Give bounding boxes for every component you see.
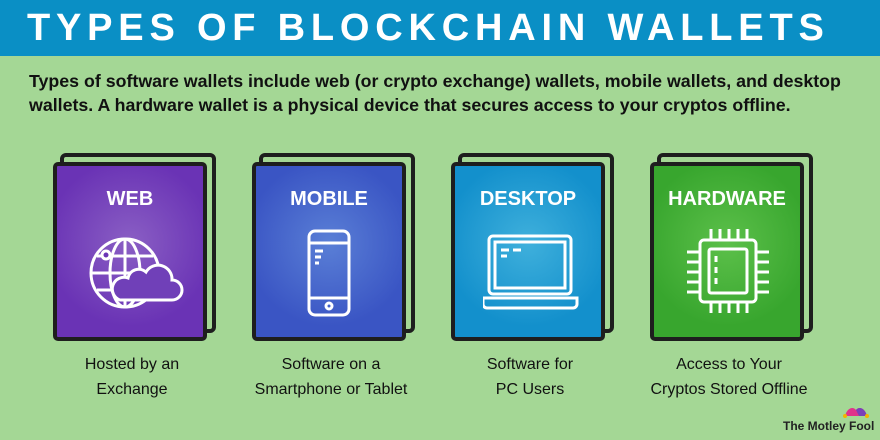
- header band: [0, 0, 880, 56]
- card: mobile: [252, 153, 415, 341]
- icon: jester hat: [843, 408, 869, 418]
- card: hardware: HARDWARE: [668, 188, 786, 210]
- caption: mobile: Software on a: [282, 356, 380, 373]
- icon: globe with cloud: [90, 238, 184, 308]
- caption: web: [85, 356, 179, 398]
- card: web: WEB: [107, 188, 153, 210]
- icon: smartphone: [308, 230, 350, 316]
- caption: hardware: [650, 356, 808, 398]
- card: mobile: MOBILE: [290, 188, 368, 210]
- card: desktop: DESKTOP: [480, 188, 576, 210]
- card: web: [53, 153, 216, 341]
- intro text: Types of software wallets include web (or crypto exchange) wallets, mobile wallets, and desktop wallets. A hardware wallet is a physical device that secures access to your cryptos offline.: [29, 71, 841, 115]
- logo: The Motley Fool: The Motley Fool: [783, 419, 874, 433]
- caption: mobile: Smartphone or Tablet: [255, 381, 407, 398]
- logo: The Motley Fool: [783, 408, 874, 433]
- caption: desktop: [487, 356, 573, 398]
- title: TYPES OF BLOCKCHAIN WALLETS: [27, 7, 830, 49]
- icon: chip: [687, 229, 769, 313]
- caption: web: Exchange: [96, 381, 168, 398]
- caption: mobile: [255, 356, 408, 398]
- card: hardware: [650, 153, 813, 341]
- caption: web: Hosted by an: [85, 356, 179, 373]
- card: desktop: [451, 153, 614, 341]
- icon: laptop: [483, 234, 578, 310]
- caption: hardware: Access to Your: [676, 356, 782, 373]
- caption: hardware: Cryptos Stored Offline: [650, 381, 808, 398]
- caption: desktop: Software for: [487, 356, 573, 373]
- caption: desktop: PC Users: [496, 381, 564, 398]
